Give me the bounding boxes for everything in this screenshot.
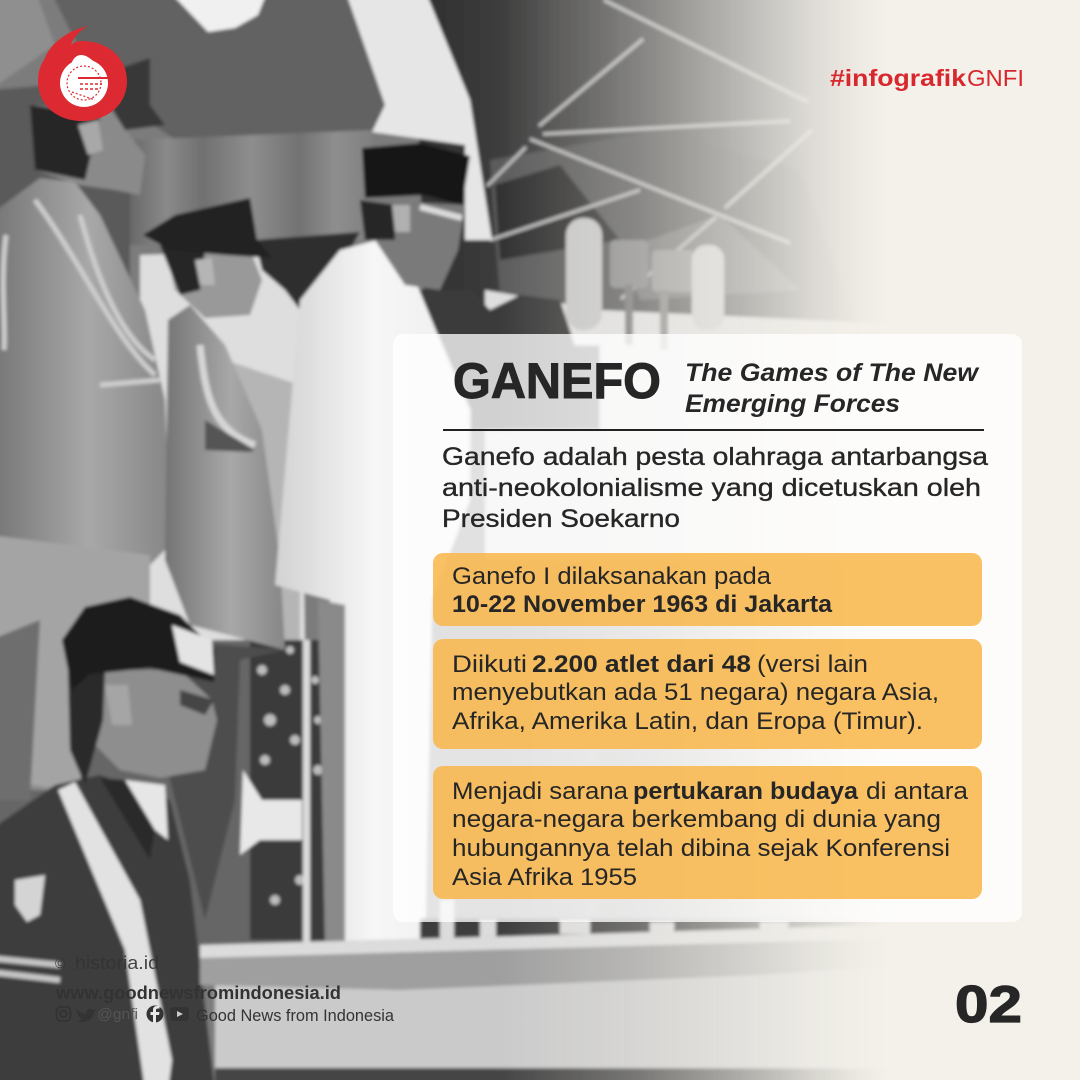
translucent content panel (393, 334, 1022, 922)
crowd strip (250, 640, 330, 940)
fact card: participants: Diikuti (452, 651, 527, 678)
stage bottom shadow (215, 1068, 910, 1080)
stage fringe (200, 925, 910, 990)
speaker suit (275, 238, 470, 945)
fact card: cultural exchange: hubungannya telah dibina sejak Konferensi (452, 835, 950, 862)
second officer body (165, 305, 285, 650)
second officer head (172, 250, 264, 320)
curtain behind officers (130, 130, 372, 245)
fact card: participants: menyebutkan ada 51 negara) negara Asia, (452, 679, 939, 706)
sleeve stripes (0, 958, 60, 980)
stadium roof (418, 0, 801, 316)
fact card: date and place (433, 553, 982, 626)
title heading: GANEFO (453, 353, 661, 409)
intro paragraph: Presiden Soekarno (442, 505, 680, 533)
emblem eagle head (72, 55, 104, 70)
second officer trousers (170, 644, 278, 917)
white flag shape (168, 0, 268, 32)
microphones (566, 218, 724, 350)
fact card: participants: (versi lain (757, 651, 868, 678)
fact card: cultural exchange (433, 766, 982, 899)
subtitle: Emerging Forces (685, 390, 900, 418)
logo: GNFI red speech comma with eagle emblem (38, 26, 127, 121)
dark foliage between officer and speaker (255, 232, 360, 310)
first officer rope (3, 200, 160, 385)
fact card: date and place: 10-22 November 1963 di Jakarta (452, 591, 833, 618)
first officer cap (110, 58, 165, 130)
lower soldier face (85, 670, 217, 778)
channel name: Good News from Indonesia (196, 1006, 395, 1025)
fact card: participants (433, 639, 982, 749)
photo credit: historia.id (75, 953, 159, 973)
fact card: cultural exchange: di antara (866, 778, 969, 805)
sleeve patch (15, 875, 45, 922)
intro paragraph (442, 443, 988, 533)
intro paragraph: anti-neokolonialisme yang dicetuskan oleh (442, 474, 981, 502)
wall behind second officer (140, 250, 305, 660)
fact card: participants: Afrika, Amerika Latin, dan Eropa (Timur). (452, 708, 923, 735)
footer credits (55, 953, 395, 1025)
crowd behind speaker (410, 290, 600, 430)
fact card: cultural exchange: pertukaran budaya (633, 778, 859, 805)
title rule (443, 429, 984, 431)
white figure in crowd (240, 770, 302, 855)
second officer cap (143, 198, 272, 258)
dark flag drape (50, 0, 385, 146)
photo credit: © (55, 955, 66, 971)
icon: facebook (146, 1006, 164, 1023)
first officer body (0, 178, 170, 790)
dark band under panel (420, 918, 910, 948)
subtitle: The Games of The New (685, 359, 980, 387)
intro paragraph: Ganefo adalah pesta olahraga antarbangsa (442, 443, 988, 471)
page number: 02 (955, 976, 1022, 1034)
website: www.goodnewsfromindonesia.id (55, 983, 341, 1003)
hashtag: GNFI (967, 65, 1024, 91)
subtitle (685, 359, 980, 418)
speaker glasses (420, 207, 462, 218)
white flag fringe (335, 0, 492, 240)
grandstand behind microphones (482, 288, 852, 553)
fact card: participants: 2.200 atlet dari 48 (532, 651, 751, 678)
hashtag (830, 65, 1024, 91)
social handle: @gnfi (97, 1006, 138, 1023)
emblem disc (60, 59, 108, 107)
lower soldier body (0, 775, 215, 1080)
speaker peci cap (362, 143, 470, 205)
lower soldier white sash (58, 782, 172, 1080)
second officer lanyard (200, 345, 255, 445)
fact card: cultural exchange: negara-negara berkembang di dunia yang (452, 806, 941, 833)
left awning (0, 0, 55, 90)
icon: twitter (76, 1009, 96, 1022)
beret badge (172, 625, 214, 675)
lower left backdrop (0, 638, 300, 949)
fact card: date and place: Ganefo I dilaksanakan pada (452, 563, 772, 590)
first officer head (30, 105, 145, 195)
emblem ornament (67, 66, 108, 100)
lower soldier shirt collar (125, 780, 168, 840)
photo backdrop (0, 0, 775, 1080)
fact card: cultural exchange: Menjadi sarana (452, 778, 629, 805)
speaker head (374, 200, 466, 292)
lower soldier beret (62, 597, 215, 690)
hashtag: #infografik (830, 65, 966, 91)
icon: youtube (170, 1007, 189, 1021)
stage front (215, 930, 910, 1068)
crowd pole (303, 640, 310, 945)
first officer trousers (0, 535, 150, 790)
icon: instagram (56, 1007, 70, 1021)
fact card: cultural exchange: Asia Afrika 1955 (452, 864, 637, 891)
crowd behind lower panel (425, 640, 600, 925)
